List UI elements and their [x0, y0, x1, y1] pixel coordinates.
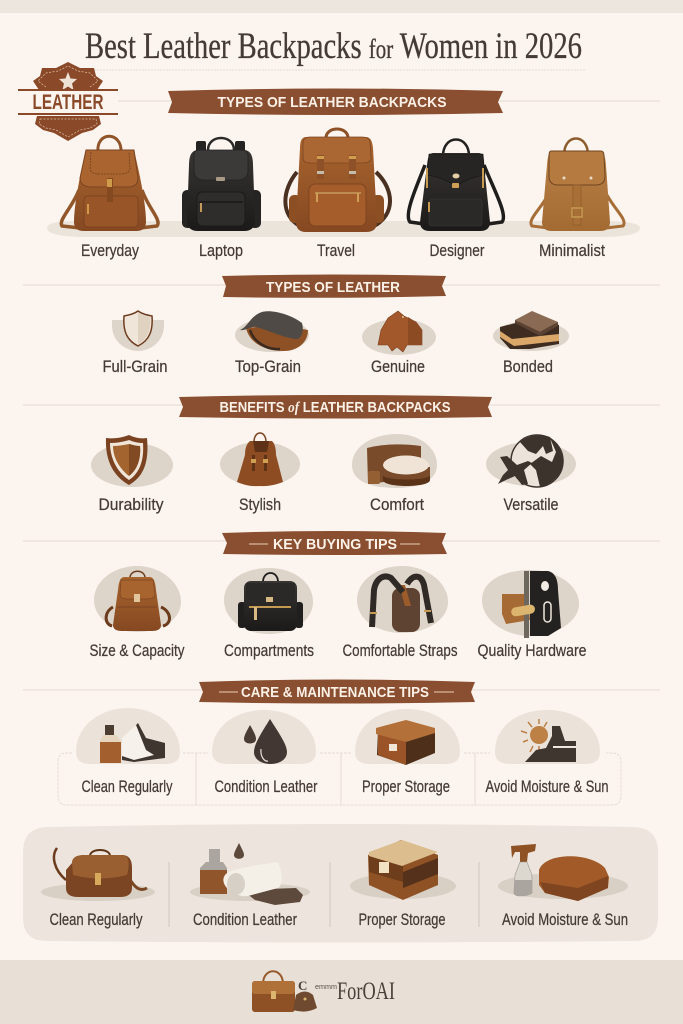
label: comfortable straps: Comfortable Straps — [342, 641, 458, 660]
label: comfort: Comfort — [370, 495, 424, 514]
banner: key buying tips: KEY BUYING TIPS — [273, 536, 397, 553]
footer band — [0, 960, 683, 1024]
backpack: minimalist — [531, 138, 624, 231]
icon: size and capacity — [94, 566, 181, 632]
icon: spray and leather case — [498, 844, 628, 901]
label: avoid moisture and sun: Avoid Moisture & Sun — [486, 777, 608, 796]
banner: types of leather backpacks: TYPES OF LEATHER BACKPACKS — [218, 94, 446, 111]
care frame with dashed outline — [58, 753, 621, 805]
label: bonded: Bonded — [503, 357, 553, 376]
icon: condition leather drop — [212, 710, 316, 764]
label: top-grain: Top-Grain — [235, 357, 301, 376]
banner: types of leather backpacks — [168, 88, 503, 115]
label: minimalist: Minimalist — [539, 241, 605, 260]
label: compartments: Compartments — [224, 641, 314, 660]
footer logo: emmm — [315, 984, 337, 991]
banner: benefits of leather backpacks: BENEFITS of LEATHER BACKPACKS — [220, 399, 450, 416]
label: stylish: Stylish — [239, 495, 281, 514]
backpack: travel — [285, 129, 390, 232]
label: laptop: Laptop — [199, 241, 243, 260]
icon: bonded leather — [493, 311, 569, 351]
label: clean regularly: Clean Regularly — [50, 910, 143, 929]
label: versatile: Versatile — [504, 495, 558, 514]
label: proper storage: Proper Storage — [362, 777, 450, 796]
banner: benefits of leather backpacks — [179, 395, 492, 418]
icon: stylish backpack — [220, 433, 300, 486]
label: avoid moisture and sun: Avoid Moisture & Sun — [502, 910, 628, 929]
banner: types of leather: TYPES OF LEATHER — [266, 279, 400, 296]
banner: types of leather — [222, 274, 446, 298]
icon: versatile globe and plane — [486, 435, 576, 487]
footer logo: C — [298, 978, 307, 993]
icon: clean regularly bottle and cloth — [76, 708, 180, 764]
icon: comfort cushion — [352, 434, 437, 488]
label: condition leather: Condition Leather — [214, 777, 318, 796]
leather badge: LEATHER — [32, 91, 104, 114]
icon: proper storage box — [355, 709, 460, 765]
label: genuine: Genuine — [371, 357, 425, 376]
label: condition leather: Condition Leather — [193, 910, 297, 929]
banner: care and maintenance tips: CARE & MAINTENANCE TIPS — [241, 684, 429, 701]
icon: genuine leather — [362, 311, 436, 355]
backpack: laptop — [182, 138, 261, 231]
backpack: designer — [408, 140, 503, 231]
icon: quality hardware — [482, 570, 579, 638]
banner: care and maintenance tips — [199, 680, 475, 704]
panel: bottom care summary — [23, 824, 658, 942]
icon: storage box — [350, 840, 456, 900]
icon: compartments — [224, 568, 313, 634]
label: everyday: Everyday — [81, 241, 139, 260]
title: Best Leather Backpacks for Women in 2026 — [85, 26, 582, 67]
banner: key buying tips — [222, 531, 447, 555]
icon: comfortable straps — [357, 566, 448, 633]
backpack: everyday — [61, 136, 158, 231]
icon: durability shield — [91, 435, 173, 487]
label: designer: Designer — [430, 241, 485, 260]
label: proper storage: Proper Storage — [358, 910, 446, 929]
icon: satchel bag — [41, 848, 155, 901]
label: durability: Durability — [98, 495, 164, 514]
leather badge — [18, 62, 118, 141]
label: full-grain: Full-Grain — [102, 357, 168, 376]
icon: full-grain shield — [112, 311, 164, 351]
label: size and capacity: Size & Capacity — [90, 641, 185, 660]
label: quality hardware: Quality Hardware — [478, 641, 586, 660]
icon: bottle and towel — [190, 843, 310, 905]
footer logo — [252, 971, 395, 1012]
label: clean regularly: Clean Regularly — [82, 777, 173, 796]
label: travel: Travel — [317, 241, 355, 260]
footer logo: ForOAI — [337, 978, 395, 1005]
backpack shadow — [47, 221, 640, 237]
icon: top-grain leather — [235, 311, 309, 352]
icon: avoid moisture and sun — [495, 710, 600, 764]
